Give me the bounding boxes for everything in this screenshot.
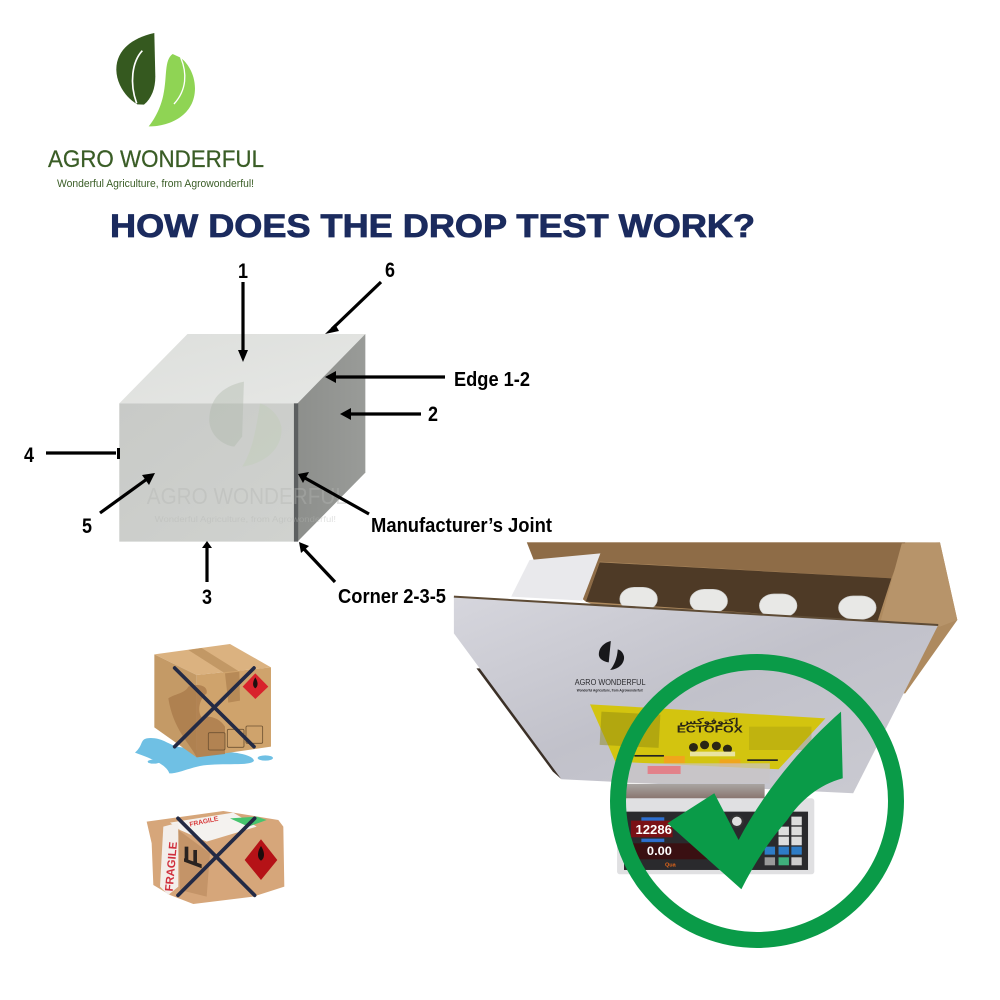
yellow product label <box>590 704 825 769</box>
open cardboard box <box>454 542 957 793</box>
watermark logo: Wonderful Agriculture, from Agrowonderful! <box>155 514 336 524</box>
cube <box>119 334 365 542</box>
arrow and label 3: 3 <box>202 586 212 609</box>
crushed box with cross <box>147 811 284 904</box>
arrow and label 4: 4 <box>24 444 34 467</box>
arrow and label 3 <box>202 541 212 609</box>
weighing scale <box>617 784 814 874</box>
keypad <box>765 817 802 865</box>
icon: green ring <box>618 662 896 940</box>
arrow and label 6: 6 <box>385 259 395 282</box>
arrow and label 6 <box>325 259 395 334</box>
arrow and label 5: 5 <box>82 515 92 538</box>
tare display: 0.00 <box>647 844 672 858</box>
weight display: 12286 <box>635 822 672 837</box>
reflection <box>627 763 770 783</box>
bottle caps <box>620 587 876 619</box>
crushed box with cross: FRAGILE <box>189 816 220 829</box>
crushed box with cross: FRAGILE <box>164 841 180 892</box>
logo: Agro Wonderful <box>48 33 264 190</box>
diagram: drop test cube <box>24 259 552 609</box>
box logo: Wonderful Agriculture, from Agrowonderful! <box>577 689 643 693</box>
arrow and label Manufacturer's Joint: Manufacturer’s Joint <box>371 515 552 537</box>
yellow product label: ECTOFOX <box>677 724 743 735</box>
yellow product label: إكتوفوكس <box>680 717 739 727</box>
arrow and label Edge 1-2 <box>325 369 530 391</box>
icon: green check mark <box>667 712 843 889</box>
arrow and label Manufacturer's Joint <box>298 472 552 537</box>
box logo <box>575 641 646 693</box>
box logo: AGRO WONDERFUL <box>575 677 646 687</box>
panel: box on weighing scale with check mark <box>454 542 957 889</box>
tagline: Wonderful Agriculture, from Agrowonderful! <box>57 178 254 190</box>
arrow and label 1: 1 <box>238 260 248 283</box>
arrow and label Edge 1-2: Edge 1-2 <box>454 369 530 391</box>
title: HOW DOES THE DROP TEST WORK? <box>110 208 755 244</box>
arrow and label 2 <box>340 403 438 426</box>
arrow and label Corner 2-3-5 <box>299 542 446 608</box>
watermark logo: AGRO WONDERFUL <box>147 484 347 510</box>
panel: rejected boxes <box>135 644 284 904</box>
arrow and label Corner 2-3-5: Corner 2-3-5 <box>338 586 446 608</box>
arrow and label 4 <box>24 444 120 467</box>
arrow and label 5 <box>82 473 155 538</box>
watermark logo <box>147 382 347 524</box>
arrow and label 1 <box>238 260 248 362</box>
icon: leaves <box>116 33 195 126</box>
leaking box with cross <box>135 644 273 773</box>
box front panel <box>454 597 938 793</box>
weighing scale: Qua <box>665 863 677 869</box>
company name: AGRO WONDERFUL <box>48 146 264 173</box>
arrow and label 2: 2 <box>428 403 438 426</box>
